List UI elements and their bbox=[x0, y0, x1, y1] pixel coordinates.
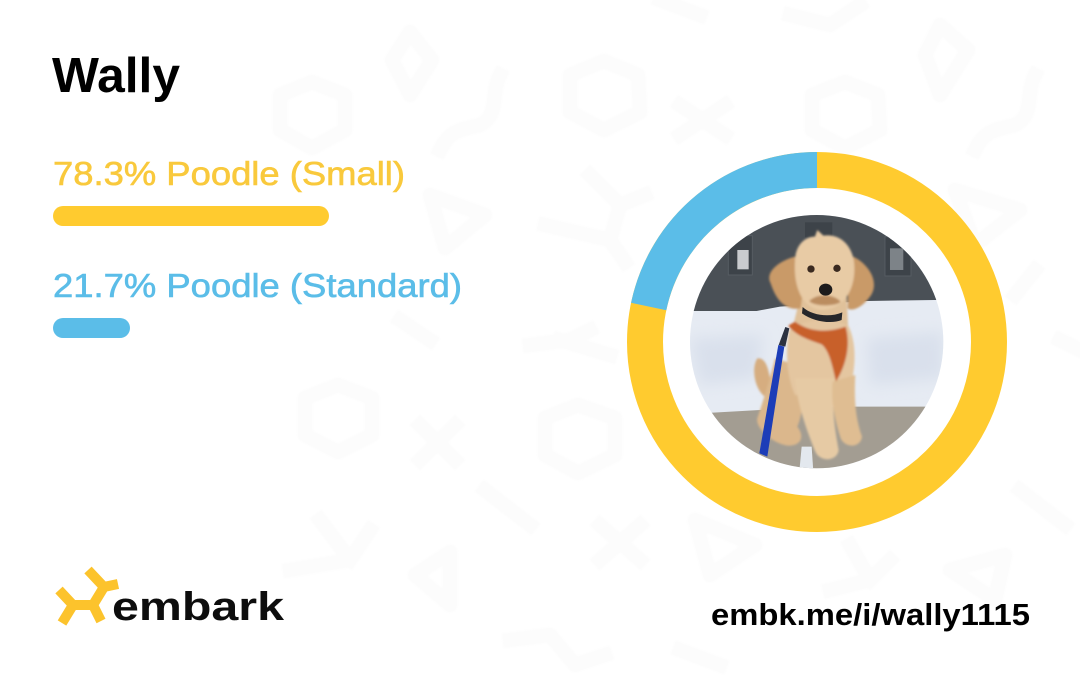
url: embk.me/i/wally1115 bbox=[711, 597, 1030, 632]
head bbox=[795, 230, 854, 310]
background pattern bbox=[280, 0, 1080, 665]
ears bbox=[769, 257, 803, 309]
neck bbox=[792, 295, 848, 332]
harness bbox=[788, 322, 848, 382]
embark logo bbox=[59, 570, 285, 629]
icon: embark mark bbox=[59, 570, 118, 623]
bar: small poodle bbox=[53, 206, 329, 226]
donut chart bbox=[645, 170, 989, 514]
label: small poodle percentage: 78.3% Poodle (Small) bbox=[53, 155, 405, 192]
tail bbox=[754, 358, 772, 397]
infographic canvas bbox=[52, 56, 1030, 632]
title: Wally bbox=[52, 49, 180, 103]
haunch and back foot bbox=[757, 358, 802, 446]
front leg right bbox=[832, 375, 862, 446]
torso bbox=[787, 321, 855, 395]
wordmark: embark bbox=[112, 585, 285, 629]
front leg left bbox=[798, 394, 840, 460]
label: standard poodle percentage: 21.7% Poodle (Standard) bbox=[53, 267, 462, 304]
bar: standard poodle bbox=[53, 318, 130, 338]
dog photo bbox=[690, 215, 944, 468]
